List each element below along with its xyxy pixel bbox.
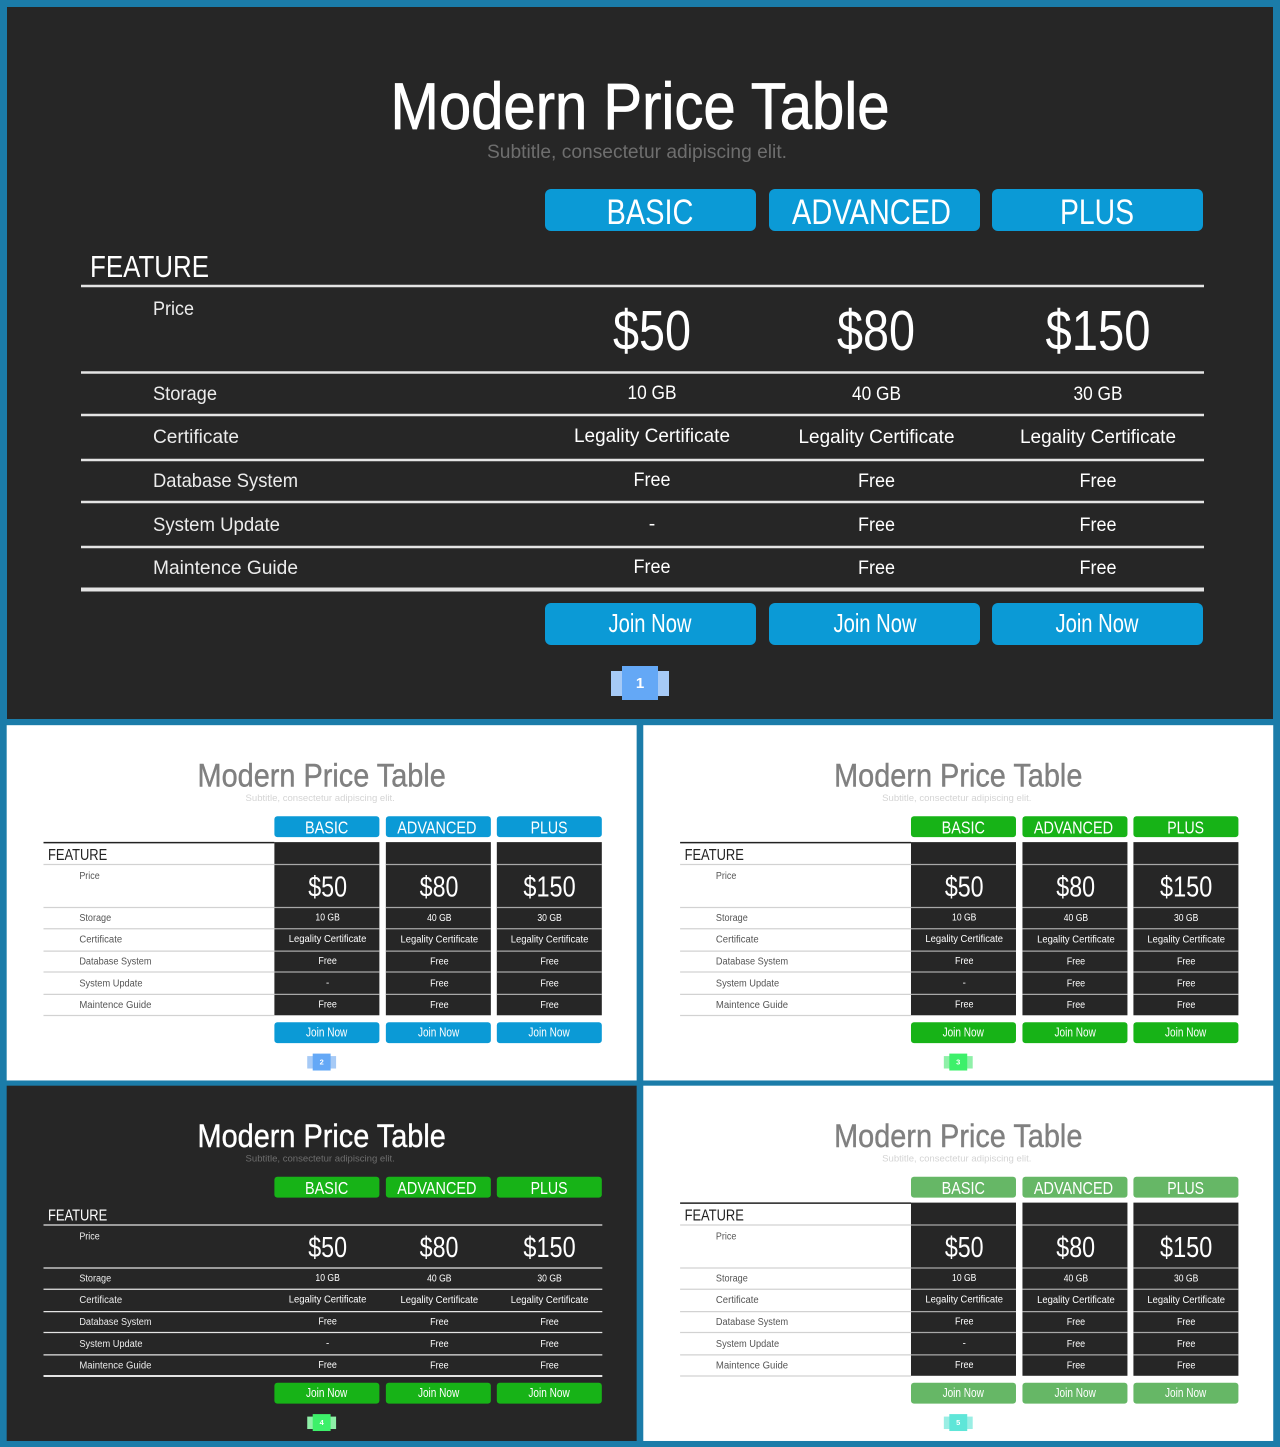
basic plan values: Legality Certificate	[574, 425, 730, 447]
plan headers: BASIC	[305, 818, 348, 838]
join now buttons: Join Now	[528, 1025, 570, 1040]
feature labels: Certificate	[716, 1295, 759, 1306]
basic plan values: 10 GB	[315, 1273, 340, 1284]
feature labels: Certificate	[153, 426, 239, 448]
title: Modern Price Table	[198, 1117, 446, 1154]
feature labels: System Update	[716, 978, 779, 989]
basic plan values: Legality Certificate	[289, 1295, 366, 1306]
page badge 3	[944, 1054, 973, 1071]
join now buttons: Join Now	[1055, 1025, 1096, 1040]
subtitle: Subtitle, consectetur adipiscing elit.	[882, 793, 1031, 804]
page badge 2: 2	[320, 1058, 324, 1067]
advanced plan values: Free	[1067, 1000, 1085, 1011]
plan headers: BASIC	[942, 1178, 985, 1198]
basic plan values: 10 GB	[952, 913, 976, 924]
feature heading: FEATURE	[48, 1208, 107, 1225]
feature labels	[153, 298, 298, 579]
advanced plan values: Free	[1067, 957, 1085, 968]
join now buttons	[545, 603, 1203, 645]
feature heading: FEATURE	[48, 847, 107, 864]
basic plan values	[289, 871, 366, 1010]
title: Modern Price Table	[390, 69, 890, 143]
join now buttons: Join Now	[306, 1025, 348, 1040]
page badge 1	[611, 666, 669, 700]
plus plan values: Free	[540, 1000, 559, 1011]
advanced plan values: Legality Certificate	[1037, 1295, 1115, 1306]
basic plan values: Free	[955, 1317, 973, 1328]
feature labels: Maintence Guide	[153, 557, 298, 579]
basic plan values: 10 GB	[315, 913, 340, 924]
advanced plan values: Free	[858, 470, 895, 492]
basic plan values: Free	[318, 1317, 337, 1328]
plus plan values: Free	[1080, 514, 1116, 536]
page badge 2	[307, 1054, 336, 1071]
basic plan values: Free	[955, 1360, 973, 1371]
dark plan columns	[911, 842, 1238, 1015]
basic plan values: 10 GB	[952, 1273, 976, 1284]
plus plan values: Legality Certificate	[1147, 935, 1225, 946]
plan headers	[545, 189, 1203, 232]
feature labels: Storage	[79, 1274, 111, 1285]
feature labels: Database System	[716, 1317, 788, 1328]
plus plan values: Free	[540, 978, 559, 989]
advanced plan values: Free	[1067, 1317, 1085, 1328]
feature labels: Database System	[716, 957, 788, 968]
basic plan values: Free	[955, 956, 973, 967]
join now buttons: Join Now	[1165, 1025, 1207, 1040]
title: Modern Price Table	[834, 1117, 1082, 1154]
plan headers: PLUS	[531, 818, 567, 838]
subtitle: Subtitle, consectetur adipiscing elit.	[882, 1153, 1031, 1164]
feature labels: Certificate	[79, 935, 122, 946]
plan headers	[911, 816, 1238, 838]
join now buttons: Join Now	[1055, 1385, 1096, 1400]
plus plan values: Free	[1177, 1317, 1195, 1328]
plus plan values: Free	[1177, 1360, 1195, 1371]
advanced plan values: Legality Certificate	[401, 935, 478, 946]
advanced plan values: Free	[430, 1317, 449, 1328]
feature labels: System Update	[153, 514, 280, 536]
advanced plan values: Free	[430, 1339, 449, 1350]
advanced plan values: Legality Certificate	[1037, 935, 1115, 946]
advanced plan values: Free	[1067, 1360, 1085, 1371]
plus plan values: Free	[1080, 470, 1116, 492]
join now buttons: Join Now	[608, 608, 692, 638]
join now buttons: Join Now	[1056, 608, 1139, 638]
basic plan values: Free	[634, 469, 670, 491]
plan headers: PLUS	[1060, 193, 1134, 232]
join now buttons: Join Now	[943, 1385, 984, 1400]
feature labels: Database System	[79, 957, 151, 968]
feature labels	[79, 871, 151, 1011]
plus plan values: $150	[1046, 299, 1150, 363]
plan headers	[274, 816, 602, 838]
advanced plan values: $80	[420, 871, 459, 903]
subtitle: Subtitle, consectetur adipiscing elit.	[246, 1153, 395, 1164]
plus plan values: Free	[540, 1339, 559, 1350]
plus plan values: 30 GB	[537, 1274, 562, 1285]
plus plan values: $150	[523, 1232, 576, 1264]
panel: slide 4 dark green	[7, 1086, 637, 1441]
feature labels	[716, 871, 788, 1011]
feature labels: System Update	[79, 1339, 143, 1350]
page badge 5	[944, 1414, 973, 1431]
advanced plan values: 40 GB	[427, 913, 452, 924]
feature labels: Storage	[153, 383, 217, 405]
plus plan values: Free	[1080, 557, 1116, 579]
panel: slide 2 white blue	[7, 725, 637, 1080]
page badge 3: 3	[956, 1058, 960, 1067]
plus plan values: 30 GB	[537, 913, 562, 924]
advanced plan values: Free	[430, 1360, 449, 1371]
basic plan values: Free	[318, 1360, 337, 1371]
feature labels	[79, 1231, 151, 1371]
advanced plan values	[401, 871, 478, 1011]
feature labels: Maintence Guide	[716, 1360, 788, 1371]
feature labels: System Update	[79, 978, 143, 989]
plan headers: PLUS	[531, 1178, 567, 1198]
plus plan values: Legality Certificate	[511, 1295, 588, 1306]
advanced plan values: 40 GB	[1064, 913, 1088, 924]
advanced plan values: 40 GB	[852, 383, 901, 405]
advanced plan values: Legality Certificate	[401, 1295, 478, 1306]
plus plan values: Legality Certificate	[511, 935, 588, 946]
feature labels: System Update	[716, 1339, 779, 1350]
plan headers: ADVANCED	[1034, 1178, 1113, 1198]
plus plan values: Free	[1177, 978, 1195, 989]
advanced plan values: Free	[1067, 1339, 1085, 1350]
plan headers: ADVANCED	[397, 818, 476, 838]
plan headers: ADVANCED	[1034, 818, 1113, 838]
advanced plan values: $80	[837, 299, 915, 363]
plus plan values: $150	[523, 871, 576, 903]
join now buttons: Join Now	[528, 1385, 570, 1400]
title: Modern Price Table	[834, 756, 1082, 793]
feature heading: FEATURE	[685, 1208, 744, 1225]
feature labels: Database System	[153, 470, 298, 492]
plus plan values: 30 GB	[1174, 1274, 1198, 1285]
advanced plan values: $80	[1056, 1232, 1095, 1264]
panel: slide 5 white muted green	[643, 1086, 1273, 1441]
join now buttons: Join Now	[418, 1385, 460, 1400]
advanced plan values: $80	[420, 1232, 459, 1264]
basic plan values: -	[649, 513, 655, 535]
dark plan columns	[274, 842, 602, 1015]
basic plan values: Legality Certificate	[289, 934, 366, 945]
advanced plan values: $80	[1056, 871, 1095, 903]
basic plan values: $50	[613, 299, 691, 363]
title: Modern Price Table	[198, 756, 446, 793]
page badge 1: 1	[636, 675, 644, 692]
advanced plan values: Free	[858, 514, 895, 536]
plus plan values: Free	[1177, 957, 1195, 968]
plus plan values: Free	[540, 1317, 559, 1328]
basic plan values	[574, 299, 730, 578]
feature labels: Certificate	[716, 935, 759, 946]
basic plan values: -	[963, 1338, 966, 1349]
basic plan values	[925, 871, 1003, 1010]
advanced plan values	[798, 299, 954, 579]
join now buttons: Join Now	[943, 1025, 984, 1040]
basic plan values: Free	[318, 956, 337, 967]
page badge 5: 5	[956, 1418, 960, 1427]
plus plan values: Legality Certificate	[1147, 1295, 1225, 1306]
advanced plan values	[401, 1232, 478, 1371]
basic plan values: -	[326, 978, 329, 989]
plan headers: BASIC	[606, 193, 694, 232]
feature labels: Maintence Guide	[79, 1000, 151, 1011]
basic plan values: Free	[634, 556, 670, 578]
plan headers	[911, 1177, 1238, 1198]
feature labels: Price	[79, 1231, 100, 1242]
plus plan values	[1020, 299, 1176, 579]
join now buttons: Join Now	[1165, 1385, 1207, 1400]
plus plan values	[511, 1232, 588, 1371]
join now buttons: Join Now	[834, 608, 917, 638]
plan headers: BASIC	[305, 1178, 348, 1198]
basic plan values: $50	[308, 871, 347, 903]
advanced plan values: Free	[430, 1000, 449, 1011]
join now buttons	[911, 1022, 1238, 1043]
advanced plan values: Free	[1067, 978, 1085, 989]
basic plan values	[289, 1232, 366, 1371]
feature labels: Storage	[716, 1274, 748, 1285]
advanced plan values: 40 GB	[427, 1274, 452, 1285]
plan headers: BASIC	[942, 818, 985, 838]
panel: slide 3 white green	[643, 725, 1273, 1080]
page badge 4: 4	[320, 1418, 325, 1427]
basic plan values: -	[326, 1338, 329, 1349]
subtitle: Subtitle, consectetur adipiscing elit.	[487, 142, 787, 163]
plan headers: PLUS	[1167, 818, 1204, 838]
basic plan values: -	[963, 978, 966, 989]
plan headers	[274, 1177, 602, 1198]
basic plan values: $50	[945, 1232, 984, 1264]
page badge 4	[307, 1414, 336, 1431]
advanced plan values: Free	[858, 557, 895, 579]
plus plan values: $150	[1160, 871, 1212, 903]
plus plan values	[511, 871, 588, 1011]
feature heading: FEATURE	[90, 249, 209, 284]
panel: slide 1 dark blue	[7, 7, 1273, 719]
feature labels: Certificate	[79, 1295, 122, 1306]
plus plan values: Free	[1177, 1000, 1195, 1011]
feature labels: Database System	[79, 1317, 151, 1328]
join now buttons	[274, 1022, 602, 1043]
feature labels: Maintence Guide	[79, 1360, 151, 1371]
basic plan values: $50	[308, 1232, 347, 1264]
join now buttons	[911, 1383, 1238, 1404]
advanced plan values: Free	[430, 978, 449, 989]
dark plan columns	[911, 1203, 1238, 1376]
feature heading: FEATURE	[685, 847, 744, 864]
plus plan values: Free	[540, 1360, 559, 1371]
basic plan values: $50	[945, 871, 984, 903]
advanced plan values: 40 GB	[1064, 1274, 1088, 1285]
basic plan values: 10 GB	[628, 382, 676, 404]
advanced plan values	[1037, 871, 1115, 1011]
advanced plan values: Free	[430, 957, 449, 968]
feature labels	[716, 1231, 788, 1371]
basic plan values: Legality Certificate	[925, 1295, 1003, 1306]
basic plan values: Free	[318, 999, 337, 1010]
advanced plan values	[1037, 1232, 1115, 1371]
feature labels: Storage	[716, 913, 748, 924]
feature labels: Maintence Guide	[716, 1000, 788, 1011]
feature labels: Price	[153, 298, 194, 320]
join now buttons	[274, 1383, 602, 1404]
plus plan values: Legality Certificate	[1020, 426, 1176, 448]
join now buttons: Join Now	[306, 1385, 348, 1400]
subtitle: Subtitle, consectetur adipiscing elit.	[246, 793, 395, 804]
plus plan values	[1147, 871, 1225, 1011]
plan headers: PLUS	[1167, 1178, 1204, 1198]
feature labels: Price	[716, 871, 736, 882]
plan headers: ADVANCED	[792, 193, 951, 232]
plus plan values: Free	[540, 957, 559, 968]
basic plan values: Free	[955, 999, 973, 1010]
plus plan values	[1147, 1232, 1225, 1371]
join now buttons: Join Now	[418, 1025, 460, 1040]
plus plan values: Free	[1177, 1339, 1195, 1350]
plus plan values: 30 GB	[1074, 383, 1122, 405]
plus plan values: $150	[1160, 1232, 1212, 1264]
feature labels: Storage	[79, 913, 111, 924]
plus plan values: 30 GB	[1174, 913, 1198, 924]
feature labels: Price	[716, 1231, 736, 1242]
basic plan values	[925, 1232, 1003, 1371]
feature labels: Price	[79, 871, 100, 882]
advanced plan values: Legality Certificate	[798, 426, 954, 448]
plan headers: ADVANCED	[397, 1178, 476, 1198]
basic plan values: Legality Certificate	[925, 934, 1003, 945]
